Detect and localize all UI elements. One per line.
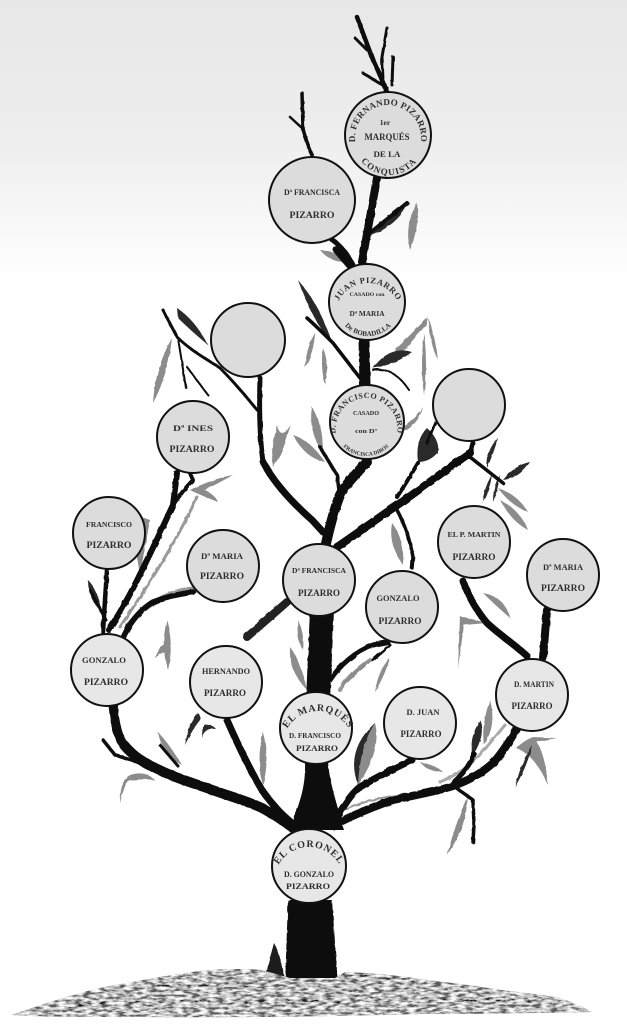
medallion: P Martin Pizarro: EL P. MARTIN [448,530,501,539]
lower stem [290,762,344,830]
medallion: P Martin Pizarro: PIZARRO [452,552,496,562]
medallion: Fernando Pizarro: CONQUISTA [362,158,416,176]
medallion: Francisco Pizarro: FRANCISCA DIBOS [343,444,388,456]
medallion: Ines Pizarro: PIZARRO [170,444,214,454]
medallion: El Marques: D. FRANCISCO [289,731,341,740]
medallion: Hernando Pizarro: HERNANDO [202,667,250,676]
medallion: Maria Pizarro left: PIZARRO [200,571,244,581]
medallion: Maria Pizarro right: PIZARRO [541,583,585,593]
medallion: D Martin Pizarro: PIZARRO [512,701,552,711]
medallion: Juan Pizarro: De BOBADILLA [344,322,392,336]
medallion: Fernando Pizarro: D. FERNANDO PIZARRO [349,99,427,142]
medallion: Maria Pizarro right: Dª MARIA [543,562,584,572]
leaves [88,203,557,855]
medallion: El Coronel: D. GONZALO [284,870,334,879]
medallion: El Marques: EL MARQUÉS [282,704,354,728]
medallion: Gonzalo Pizarro left: GONZALO [82,655,126,665]
medallion: Francisco Pizarro [329,384,405,460]
medallion: El Coronel: PIZARRO [286,881,330,891]
medallion: Fernando Pizarro: DE LA [374,150,401,159]
medallion: Francisco Pizarro left [73,497,145,569]
medallion: Gonzalo Pizarro middle [366,571,438,643]
medallion: Francisco Pizarro: CASADO [353,411,379,417]
medallion: Gonzalo Pizarro left [71,634,143,706]
medallion: Maria Pizarro left: Dª MARIA [201,551,244,561]
sky background [0,0,627,280]
middle stem [306,610,334,700]
medallion: Juan Pizarro: CASADO con [350,292,384,298]
medallion: Juan Pizarro lower: D. JUAN [406,708,440,717]
medallion: Francisco Pizarro: con Dª [355,429,377,435]
medallion: Francisca Pizarro top: PIZARRO [290,210,334,220]
medallion: El Marques [279,692,354,764]
medallion: Maria Pizarro left [187,530,259,602]
medallion: Juan Pizarro: JUAN PIZARRO [334,278,401,301]
medallion: Juan Pizarro: Dª MARIA [350,309,385,318]
medallion: Maria Pizarro right [527,539,599,611]
medallion: Gonzalo Pizarro middle: PIZARRO [378,616,422,626]
medallion: D Martin Pizarro [496,659,568,731]
medallion: El Marques: PIZARRO [296,743,338,753]
medallion: Francisca Pizarro middle: PIZARRO [298,588,340,598]
medallion: Francisca Pizarro top: Dª FRANCISCA [284,188,340,197]
trunk side stump [262,943,286,985]
branches [90,17,547,842]
medallion: Fernando Pizarro: 1er [380,118,391,127]
medallion: P Martin Pizarro [438,506,510,578]
medallion: Francisco Pizarro left: PIZARRO [86,540,132,550]
medallion: Francisco Pizarro: D. FRANCISCO PIZARRO [330,392,403,434]
medallion: D Martin Pizarro: D. MARTIN [514,680,554,689]
medallion: Francisca Pizarro middle [283,544,355,616]
medallion: Juan Pizarro lower: PIZARRO [400,729,442,739]
medallion: Francisca Pizarro middle: Dª FRANCISCA [292,566,347,575]
trunk [285,900,338,985]
medallion: Hernando Pizarro: PIZARRO [204,688,246,698]
medallion: Ines Pizarro: Dª INES [173,423,213,433]
ground mound [12,969,592,1017]
medallion: El Coronel [271,830,347,902]
medallion: Gonzalo Pizarro middle: GONZALO [376,593,420,603]
medallion: Gonzalo Pizarro left: PIZARRO [84,677,128,687]
medallion: Francisca Pizarro top [269,157,355,243]
medallion: Fernando Pizarro [344,91,432,179]
medallion: Fernando Pizarro: MARQUÉS [364,132,410,142]
medallion: Ines Pizarro [157,401,229,473]
medallion: blank right [433,369,505,441]
tree drawing [88,17,557,985]
medallion: Hernando Pizarro [190,646,262,718]
gray side branches [120,497,505,810]
medallion: Juan Pizarro lower [384,687,456,759]
medallion: Juan Pizarro [328,263,406,341]
medallion: Francisco Pizarro left: FRANCISCO [86,520,132,529]
medallion: blank left [211,303,285,377]
medallion: El Coronel: EL CORONEL [273,840,343,865]
